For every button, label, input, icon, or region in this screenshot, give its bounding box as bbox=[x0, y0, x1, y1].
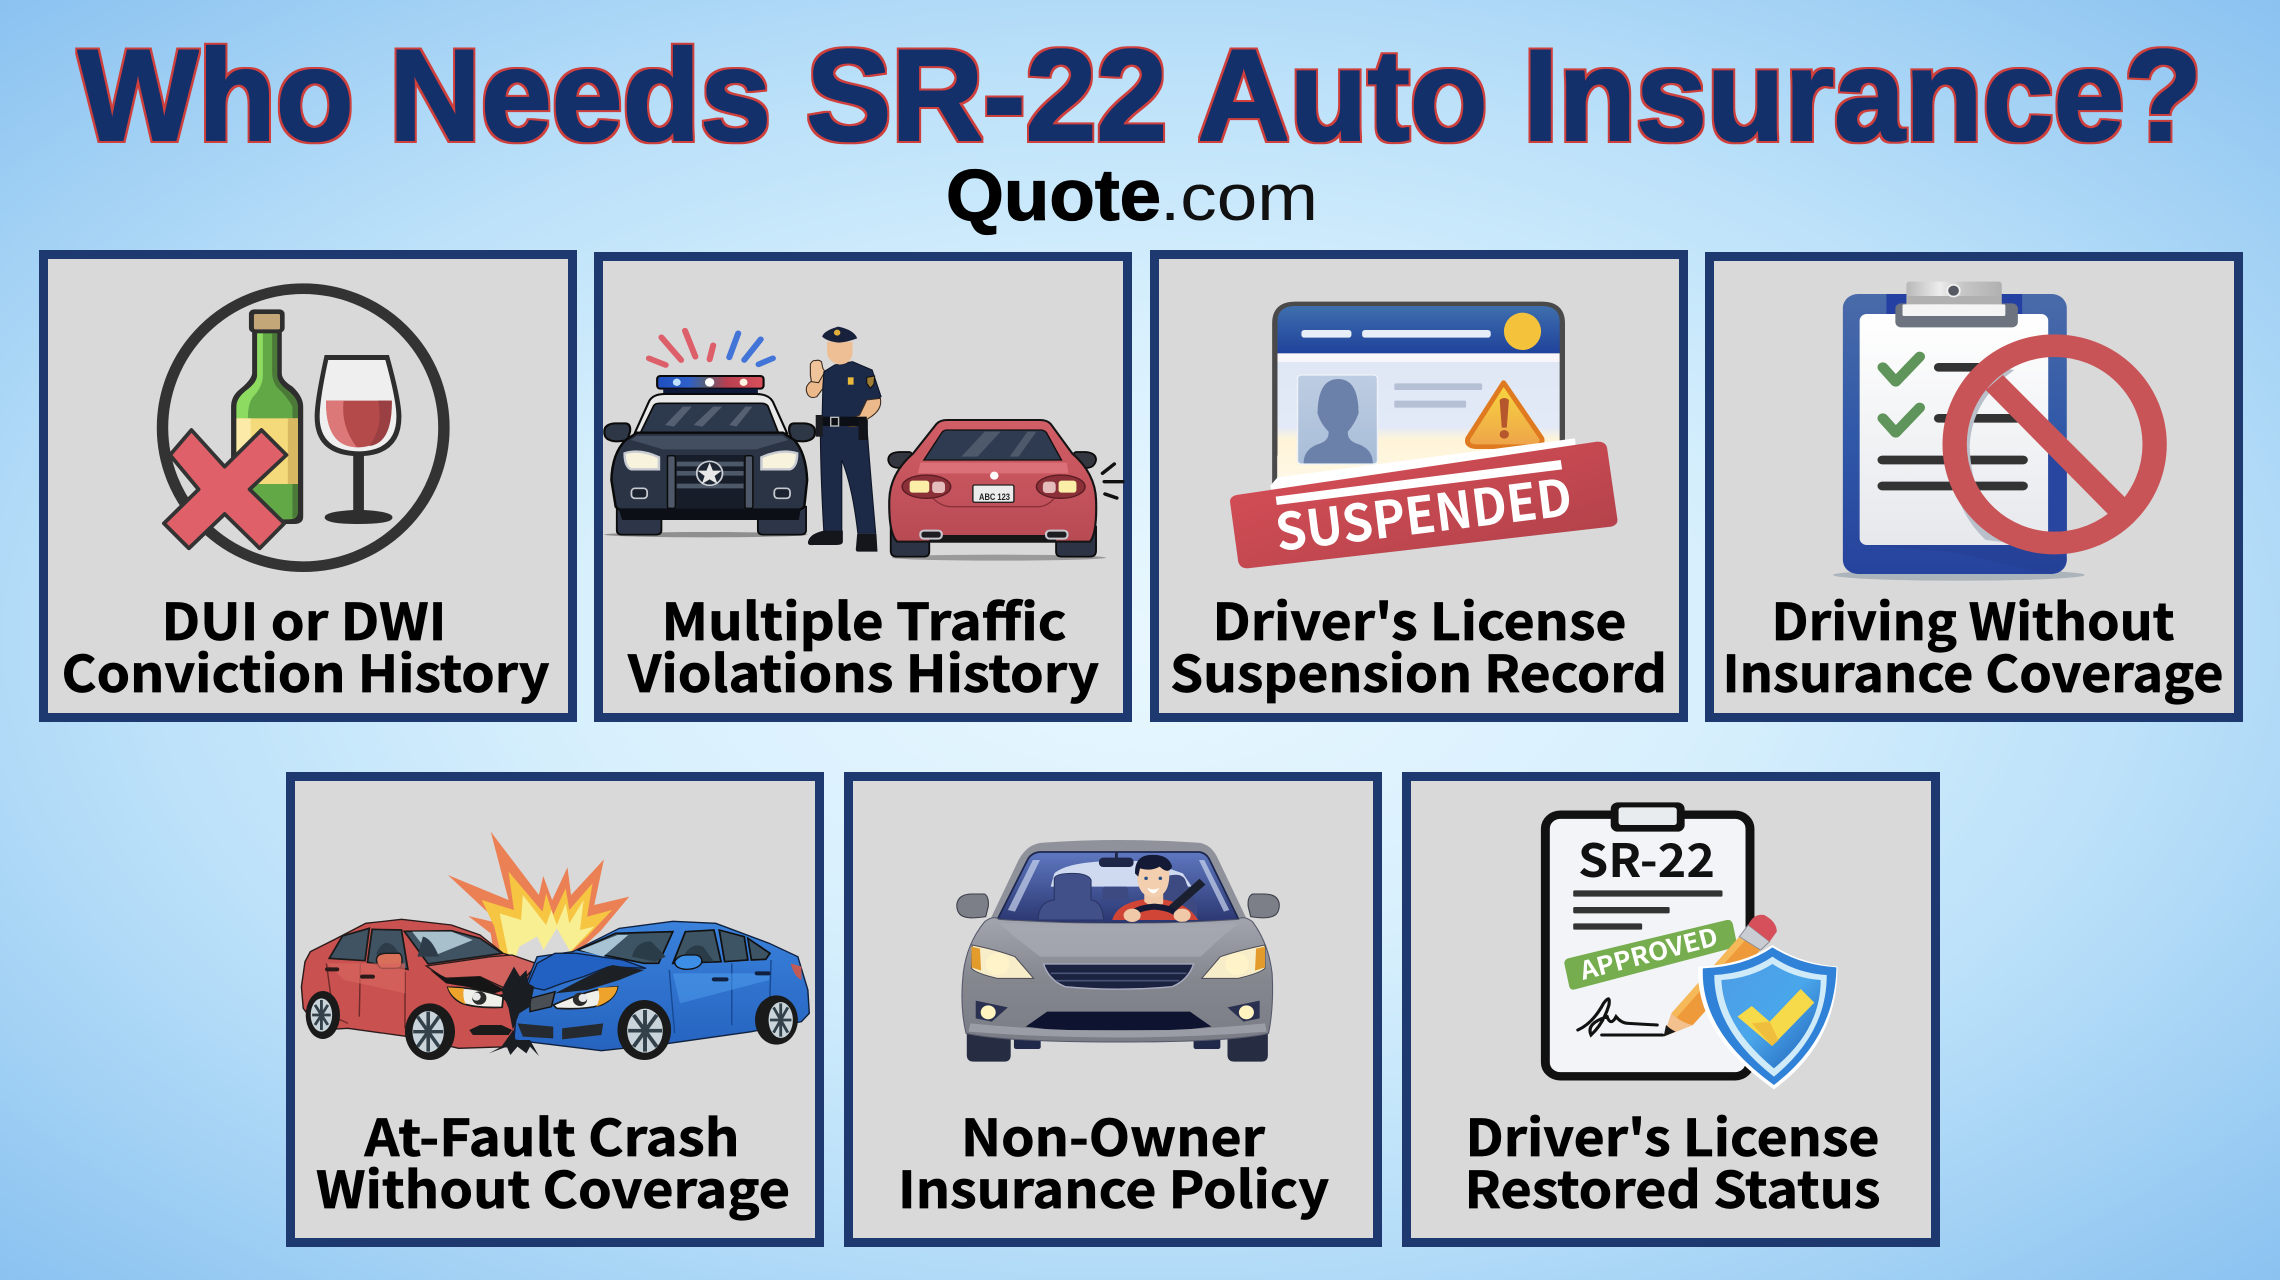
icon: SR-22 approved form with pencil and shield bbox=[1545, 802, 1837, 1089]
stamp text: APPROVED: APPROVED bbox=[1575, 917, 1721, 988]
heading: Driver's License Suspension Record: Suspension Record bbox=[1170, 633, 1667, 707]
panel: Driver's License Restored bbox=[1406, 776, 1936, 1242]
icon: suspended driver's license bbox=[1230, 304, 1617, 568]
heading: At-Fault Crash Without Coverage: At-Fault Crash bbox=[363, 1097, 740, 1171]
blue car bbox=[514, 921, 809, 1051]
icon: wine bottle and glass with red X bbox=[162, 289, 444, 567]
panel: Multiple Traffic Violations bbox=[598, 256, 1128, 718]
panel: Non-Owner Insurance Policy bbox=[848, 776, 1378, 1242]
red car bbox=[892, 555, 1106, 561]
heading: Multiple Traffic Violations History: Multiple Traffic bbox=[662, 581, 1066, 655]
title: Who Needs SR-22 Auto Insurance? bbox=[78, 22, 2202, 168]
icon: gray car front view with driver bbox=[957, 840, 1279, 1062]
logo: Quote.com: Quote bbox=[946, 156, 1161, 236]
crash debris bbox=[489, 967, 539, 1056]
heading: Multiple Traffic Violations History bbox=[627, 581, 1099, 707]
heading: Driving Without Insurance Coverage: Insurance Coverage bbox=[1722, 633, 2224, 707]
heading: Driving Without Insurance Coverage bbox=[1722, 581, 2224, 707]
heading: Driver's License Restored Status: Driver's License bbox=[1466, 1097, 1880, 1171]
heading: At-Fault Crash Without Coverage bbox=[316, 1097, 790, 1223]
heading: Multiple Traffic Violations History: Violations History bbox=[627, 633, 1099, 707]
red car bbox=[301, 919, 539, 1048]
heading: At-Fault Crash Without Coverage: Without Coverage bbox=[316, 1149, 790, 1223]
heading: Driver's License Restored Status bbox=[1464, 1097, 1880, 1223]
heading: Non-Owner Insurance Policy bbox=[898, 1097, 1329, 1223]
heading: Driver's License Restored Status: Restored Status bbox=[1464, 1149, 1880, 1223]
panel: DUI or DWI bbox=[44, 254, 572, 718]
logo: Quote.com bbox=[946, 156, 1318, 236]
heading: DUI or DWI Conviction History: DUI or DWI bbox=[162, 581, 446, 655]
form title: SR-22: SR-22 bbox=[1578, 825, 1715, 891]
logo: Quote.com: .com bbox=[1160, 160, 1318, 234]
icon: clipboard with prohibition sign bbox=[1833, 282, 2155, 581]
icon: police car, officer and red car bbox=[604, 327, 1123, 561]
heading: Driving Without Insurance Coverage: Driving Without bbox=[1772, 581, 2174, 655]
panel: Driving Without Insurance bbox=[1710, 256, 2238, 718]
license plate text: ABC 123 bbox=[979, 492, 1010, 502]
heading: DUI or DWI Conviction History bbox=[62, 581, 550, 707]
panel: At-Fault Crash bbox=[290, 776, 820, 1242]
icon: two cars colliding with explosion bbox=[301, 832, 809, 1060]
panel: Driver's License Suspension bbox=[1154, 254, 1684, 718]
heading: DUI or DWI Conviction History: Conviction History bbox=[62, 633, 550, 707]
officer bbox=[820, 425, 876, 533]
heading: Non-Owner Insurance Policy: Non-Owner bbox=[961, 1097, 1266, 1171]
stamp text: SUSPENDED: SUSPENDED bbox=[1271, 456, 1576, 566]
heading: Driver's License Suspension Record bbox=[1170, 581, 1667, 707]
heading: Non-Owner Insurance Policy: Insurance Policy bbox=[898, 1149, 1329, 1223]
heading: Driver's License Suspension Record: Driver's License bbox=[1212, 581, 1626, 655]
